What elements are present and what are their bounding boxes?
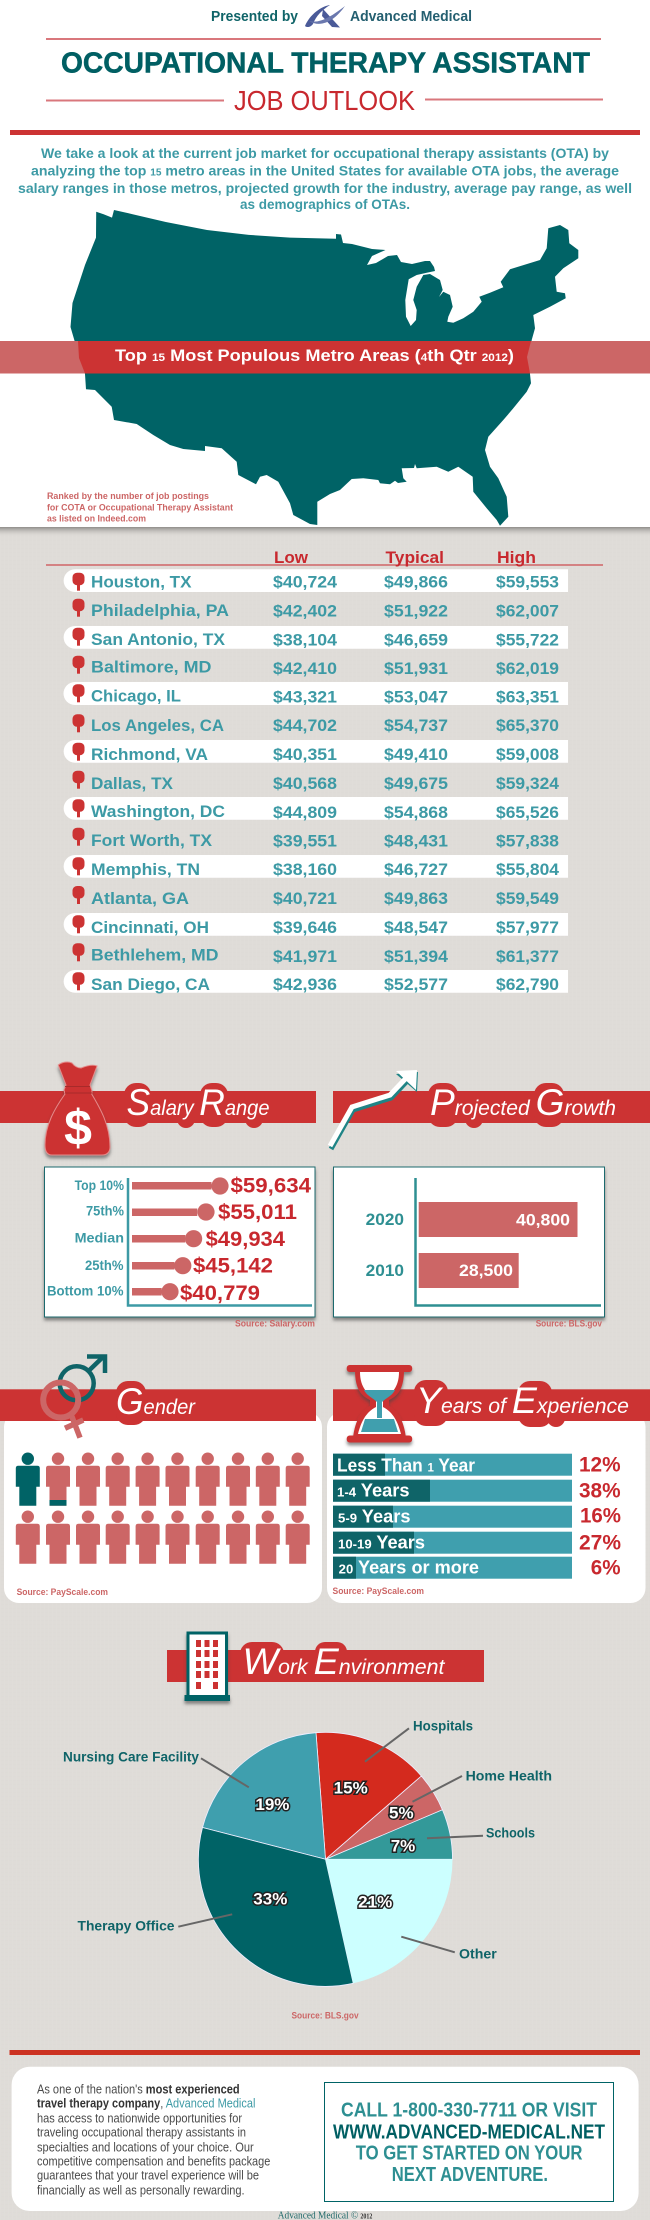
high salaries: $62,019 [496,660,559,678]
city names: Chicago, IL [91,687,181,706]
table header: Low [274,548,309,567]
high salaries: $63,351 [496,688,559,706]
location pins [72,573,84,990]
panel: projected growth chart [334,1167,604,1317]
city names: Atlanta, GA [91,889,189,908]
typical salaries: $54,868 [384,804,448,822]
heading: projected growth [333,1082,650,1128]
about text: specialties and locations of your choice. Our [37,2139,254,2154]
low salaries: $38,160 [273,861,337,879]
typical salaries [384,573,449,994]
typical salaries: $51,931 [384,660,448,678]
bar: 2020: 40,800 [516,1211,570,1230]
source: gender: Source: PayScale.com [17,1587,108,1598]
high salaries: $65,526 [496,804,559,822]
city names: Bethlehem, MD [91,946,218,965]
experience labels [337,1456,479,1577]
bar: 2010: 2010 [366,1261,404,1280]
typical salaries: $46,727 [384,861,448,879]
heading: work environment: Work Environment [242,1641,446,1682]
salary percentile labels [47,1178,124,1299]
pie percentages: 19% [255,1795,289,1814]
salary values [180,1175,311,1305]
pie labels [63,1718,552,1962]
bar: 2020: 2020 [366,1210,404,1229]
contact box: CALL 1-800-330-7711 OR VISIT [341,2100,597,2122]
experience percentages: 12% [579,1454,621,1477]
city names: San Antonio, TX [91,630,226,649]
low salaries [273,573,338,994]
experience labels: Less Than 1 Year [337,1456,475,1476]
about text: travel therapy company, Advanced Medical [37,2095,255,2110]
heading: salary range [0,1082,316,1128]
city names: Philadelphia, PA [91,601,229,620]
typical salaries: $51,922 [384,603,448,621]
pie percentages: 33% [253,1889,287,1908]
leader lines [178,1728,483,1952]
heading: years of experience: Years of Experience [416,1380,629,1421]
high salaries: $59,549 [496,890,559,908]
salary values: $59,634 [230,1175,311,1198]
typical salaries: $49,866 [384,573,448,591]
intro text: salary ranges in those metros, projected growth for the industry, average pay range, as well [18,180,632,196]
source: BLS work environment: Source: BLS.gov [292,2011,359,2022]
city names [91,572,229,994]
high salaries: $59,324 [496,775,560,793]
intro text: We take a look at the current job market for occupational therapy assistants (OTA) by [41,145,609,161]
panel: salary range chart [44,1167,315,1317]
bar: 2010: 28,500 [459,1261,513,1280]
heading: gender: Gender [116,1381,196,1422]
salary values: $40,779 [180,1282,260,1305]
subtitle: JOB OUTLOOK [234,85,415,116]
low salaries: $40,351 [273,746,337,764]
about text: financially as well as personally rewarding. [37,2182,245,2197]
salary values: $49,934 [206,1228,285,1251]
pie percentages: 7% [391,1836,415,1855]
panel: years of experience [327,1365,650,1603]
heading: salary range: Salary Range [126,1082,270,1123]
about text [37,2081,270,2197]
typical salaries: $48,547 [384,919,448,937]
high salaries: $59,008 [496,746,559,764]
about text: traveling occupational therapy assistants in [37,2124,246,2139]
contact box: WWW.ADVANCED-MEDICAL.NET [333,2121,605,2143]
icon: Advanced Medical logo [305,5,345,28]
city names: Richmond, VA [91,745,208,764]
icon: money bag: $ [64,1100,92,1156]
lollipop bars [132,1177,229,1300]
experience percentages: 38% [579,1479,621,1502]
typical salaries: $53,047 [384,688,448,706]
high salaries: $55,804 [496,861,560,879]
banner: top 15 metro areas: Top 15 Most Populous Metro Areas ( 4th Qtr 2012) [115,346,514,365]
city names: Houston, TX [91,572,192,591]
slice: hospitals [316,1732,421,1859]
experience bars [333,1454,572,1579]
salary percentile labels: 75th% [86,1204,124,1219]
icon: hourglass [347,1365,412,1442]
low salaries: $44,702 [273,717,337,735]
low salaries: $41,971 [273,948,337,966]
low salaries: $39,551 [273,832,337,850]
pie chart: work environment [63,1718,552,1986]
pie percentages [253,1778,415,1912]
typical salaries: $52,577 [384,976,448,994]
heading: work environment [167,1641,484,1682]
city names: Dallas, TX [91,774,174,793]
company name: Advanced Medical [350,8,472,25]
about text: As one of the nation's most experienced [37,2081,240,2096]
low salaries: $39,646 [273,919,337,937]
slice: other [326,1859,453,1983]
panel: call to action [12,2067,639,2211]
typical salaries: $51,394 [384,948,449,966]
low salaries: $40,568 [273,775,337,793]
slice: therapy office [198,1828,353,1986]
experience labels: 5-9 Years [338,1506,410,1526]
city names: San Diego, CA [91,975,210,994]
heading: projected growth: Projected Growth [430,1082,616,1123]
low salaries: $44,809 [273,804,337,822]
panel: header and map [0,0,650,537]
intro text [18,145,632,212]
note: ranking method: as listed on Indeed.com [47,514,146,525]
experience percentages: 27% [579,1531,621,1554]
about text: guarantees that your travel experience will be [37,2167,259,2182]
experience percentages [579,1454,621,1579]
icon: building [184,1633,230,1701]
pie percentages: 5% [389,1804,414,1823]
city names: Washington, DC [91,802,225,821]
high salaries [496,573,560,994]
typical salaries: $49,863 [384,890,448,908]
table header: High [497,548,536,567]
city names: Fort Worth, TX [91,831,213,850]
low salaries: $43,321 [273,688,337,706]
city names: Cincinnati, OH [91,918,209,937]
experience percentages: 16% [580,1505,621,1528]
contact box: TO GET STARTED ON YOUR [356,2142,583,2164]
banner: top 15 metro areas [0,341,650,374]
pie labels: Therapy Office [78,1918,175,1934]
salary percentile labels: Top 10% [75,1178,124,1193]
high salaries: $57,977 [496,919,559,937]
table header: Typical [386,548,444,567]
high salaries: $62,007 [496,603,559,621]
high salaries: $57,838 [496,832,559,850]
slice: home health [326,1776,442,1859]
city names: Los Angeles, CA [91,716,224,735]
intro text: analyzing the top 15 metro areas in the United States for available OTA jobs, the average [31,162,619,178]
low salaries: $42,936 [273,976,337,994]
low salaries: $40,724 [273,573,338,591]
panel: gender [0,1356,322,1603]
note: ranking method: for COTA or Occupational Therapy Assistant [47,502,234,514]
typical salaries: $48,431 [384,832,448,850]
low salaries: $42,410 [273,660,337,678]
salary percentile labels: 25th% [85,1258,124,1273]
high salaries: $61,377 [496,948,559,966]
presented by text: Presented by [211,8,299,25]
source: BLS growth: Source: BLS.gov [536,1319,603,1330]
slice: nursing care facility [202,1733,326,1859]
icon: gender symbols [43,1356,105,1438]
note: ranking method [47,491,234,525]
source: experience: Source: PayScale.com [332,1586,424,1597]
high salaries: $62,790 [496,976,559,994]
icon: growth arrow [330,1070,418,1149]
source: salary: Source: Salary.com [235,1319,315,1330]
salary values: $55,011 [218,1201,297,1224]
about text: has access to nationwide opportunities for [37,2110,243,2125]
bar: 2010 [366,1253,519,1288]
typical salaries: $54,737 [384,717,448,735]
pie labels: Nursing Care Facility [63,1749,199,1765]
pie labels: Home Health [466,1768,552,1784]
slice: schools [326,1810,452,1859]
contact box: NEXT ADVENTURE. [392,2164,548,2186]
bar: 2020 [366,1202,578,1237]
icon: money bag [45,1062,110,1156]
table: metro salaries [46,548,603,994]
salary percentile labels: Median [75,1231,124,1246]
table header [46,548,603,567]
title: OCCUPATIONAL THERAPY ASSISTANT [61,48,590,80]
experience labels: 1-4 Years [337,1481,410,1501]
city names: Memphis, TN [91,860,200,879]
intro text: as demographics of OTAs. [240,196,410,212]
typical salaries: $49,410 [384,746,448,764]
high salaries: $65,370 [496,717,559,735]
salary percentile labels: Bottom 10% [47,1284,124,1299]
pictogram: people row one [16,1452,310,1506]
map of United States [70,210,578,526]
experience labels: 20 Years or more [339,1557,479,1577]
high salaries: $55,722 [496,631,559,649]
low salaries: $42,402 [273,603,337,621]
typical salaries: $49,675 [384,775,448,793]
note: ranking method: Ranked by the number of job postings [47,491,209,502]
typical salaries: $46,659 [384,631,448,649]
pie percentages: 15% [334,1778,368,1797]
low salaries: $40,721 [273,890,337,908]
pie labels: Hospitals [413,1718,473,1734]
contact box [324,2082,614,2202]
pie labels: Schools [486,1825,535,1841]
experience percentages: 6% [591,1556,621,1579]
city names: Baltimore, MD [91,658,212,677]
alternating row backgrounds [64,569,568,993]
about text: competitive compensation and benefits package [37,2153,270,2168]
experience labels: 10-19 Years [338,1532,425,1552]
low salaries: $38,104 [273,631,338,649]
high salaries: $59,553 [496,573,559,591]
pictogram: people row two [16,1510,310,1564]
salary values: $45,142 [193,1255,273,1278]
pie labels: Other [459,1946,497,1962]
pie percentages: 21% [358,1893,392,1912]
